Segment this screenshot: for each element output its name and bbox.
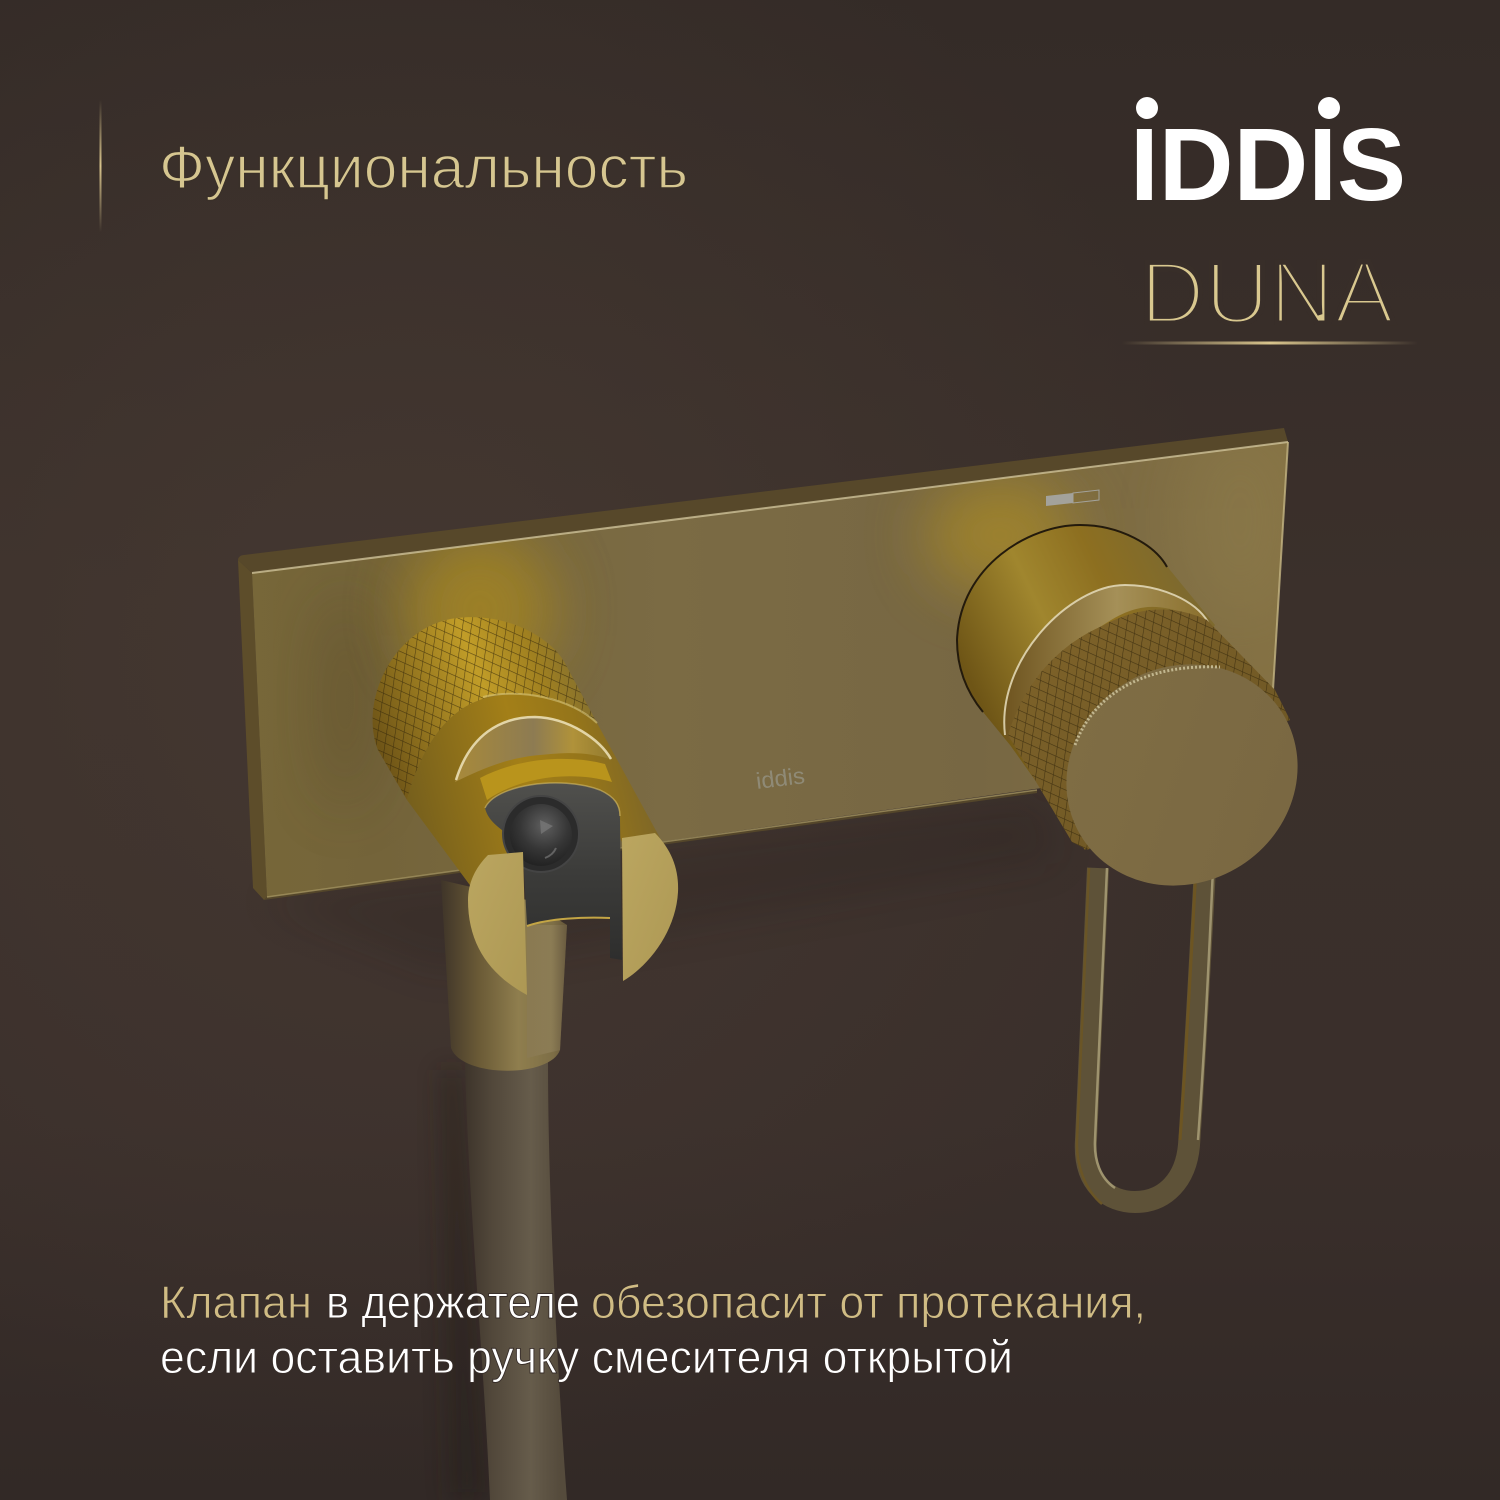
crescent shelf [455,717,612,800]
holder body [407,694,660,888]
ring [1004,585,1208,740]
valve interior [485,783,622,960]
knurled cylinder [373,617,597,800]
hose [465,1060,567,1500]
knurled cylinder [1008,610,1290,850]
caption: обезопасит от протекания, [591,1276,1146,1328]
heading: Функциональность [159,134,688,201]
caption: в держателе [326,1276,580,1328]
collar and pipe under holder [441,880,567,1071]
plate engraved logo: iddis [754,762,806,794]
left knob: holder [373,617,678,995]
handle loop [1077,868,1213,1204]
base cylinder [957,525,1215,850]
right holder face [622,833,678,981]
product illustration: shower mixer [238,420,1338,1500]
left holder face [468,852,527,995]
series name: DUNA: DUNA [1140,243,1394,342]
right knob: mixer lever [957,525,1338,928]
decorative line under series name [1122,342,1418,344]
decorative vertical gold line [100,100,102,232]
front disc [1026,622,1338,928]
caption [160,1276,1146,1383]
wall plate [238,420,1300,900]
caption: Клапан [160,1276,312,1328]
caption: если оставить ручку смесителя открытой [160,1331,1013,1383]
temperature indicator [1046,490,1099,506]
wall shadow [262,800,1060,970]
brand logo: IDDIS: IDDIS [1130,107,1406,222]
